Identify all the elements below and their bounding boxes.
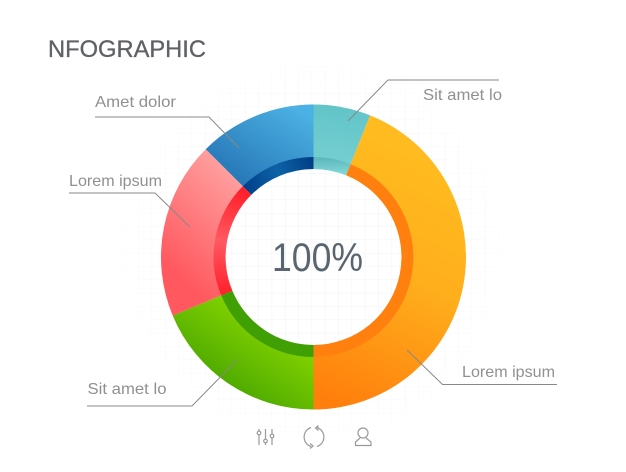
center value: 100% — [272, 236, 363, 280]
background grid — [152, 80, 472, 414]
callout: Lorem ipsum right: Lorem ipsum — [462, 364, 555, 381]
callout: Amet dolor: Amet dolor — [95, 94, 177, 111]
callout: Sit amet lo top: Sit amet lo — [423, 87, 502, 104]
segment: teal — [314, 104, 370, 175]
callout: Lorem ipsum left: Lorem ipsum — [69, 173, 162, 190]
segment: red — [161, 149, 251, 316]
segment: green — [173, 291, 314, 410]
segment: blue — [206, 104, 314, 195]
donut chart — [161, 104, 466, 410]
callout: Sit amet lo bottom — [87, 360, 237, 406]
callout: Lorem ipsum right — [407, 350, 557, 384]
icon: refresh — [304, 426, 324, 448]
callout: Sit amet lo bottom: Sit amet lo — [88, 381, 167, 398]
title: NFOGRAPHIC — [48, 36, 206, 63]
segment: orange — [314, 115, 466, 410]
callout: Sit amet lo top — [348, 80, 502, 121]
callout: Lorem ipsum left — [69, 173, 190, 227]
callout: Amet dolor — [95, 94, 239, 148]
icon: user — [356, 428, 371, 446]
icon: sliders — [257, 429, 274, 445]
